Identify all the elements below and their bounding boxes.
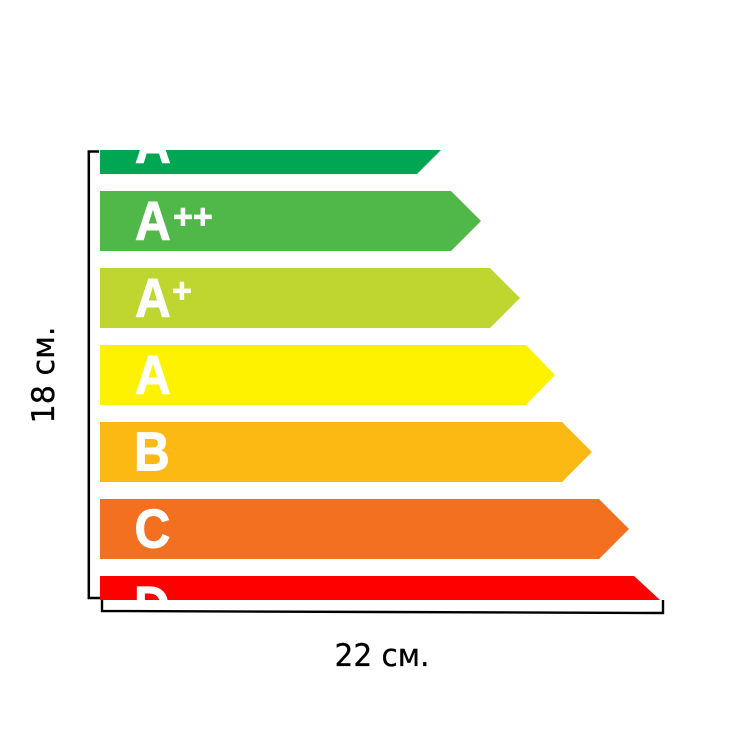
bar: C: C: [134, 499, 170, 560]
width label: 22 см.: [334, 638, 430, 674]
bar: D (cropped): [100, 576, 660, 600]
bar: A+: [100, 268, 520, 329]
bar: A+++ (cropped): A: [135, 114, 171, 175]
bar: C: [100, 499, 629, 560]
bar: A+: A: [135, 268, 171, 329]
bar: A+++ (cropped): [100, 150, 441, 174]
bar: D (cropped): D: [134, 576, 170, 637]
bar: B: B: [134, 422, 170, 483]
width bracket: [102, 600, 663, 613]
bar: A: [100, 345, 555, 406]
bar: A++: A: [135, 191, 171, 252]
bar: A++: [100, 191, 481, 252]
height bracket: [89, 152, 100, 598]
bar: A+: +: [172, 272, 192, 310]
height label: 18 см.: [26, 326, 62, 424]
bar: B: [100, 422, 592, 483]
bar: A: A: [135, 345, 171, 406]
energy class bars: [100, 150, 660, 600]
bar: A++: ++: [173, 198, 213, 236]
